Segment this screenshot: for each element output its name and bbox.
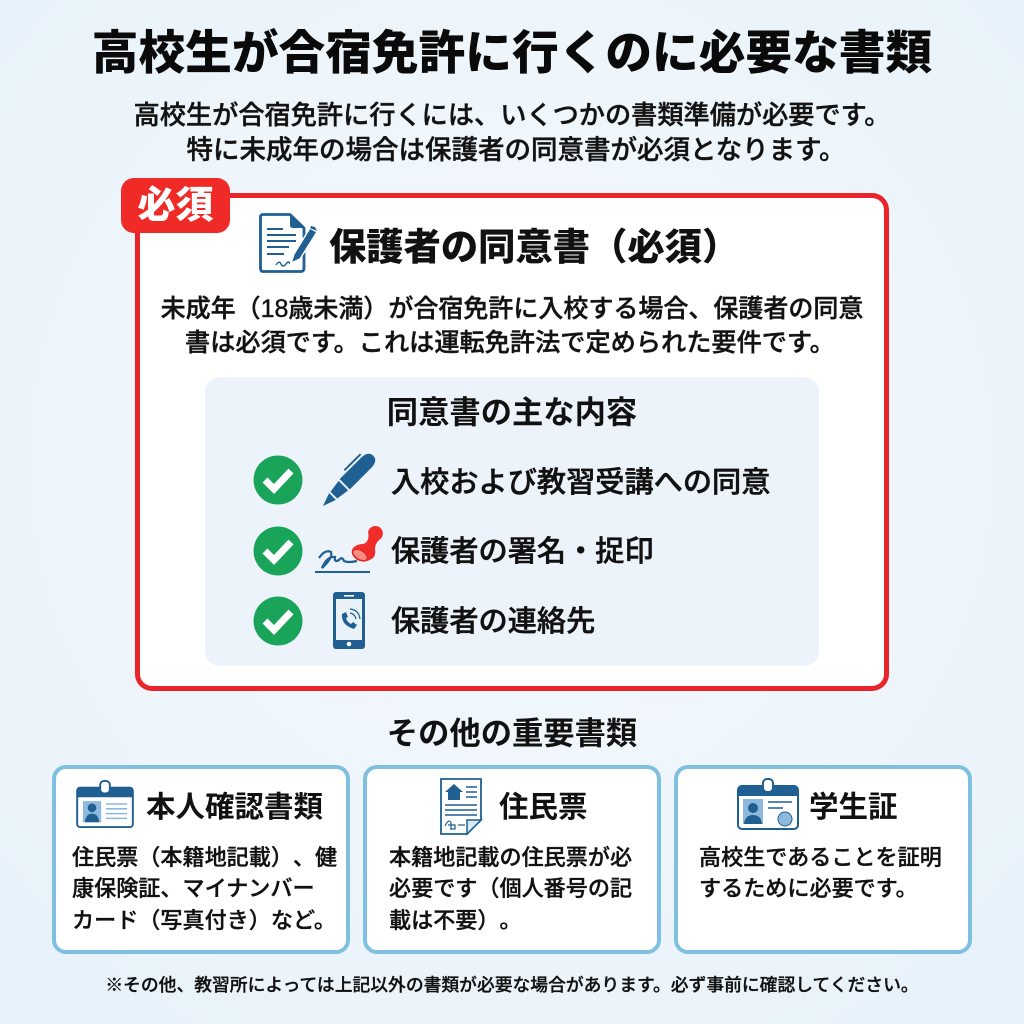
icon: smartphone [333, 592, 365, 649]
card text [699, 845, 942, 901]
card: resident record [363, 765, 661, 954]
intro text: 特に未成年の場合は保護者の同意書が必須となります。 [186, 135, 846, 165]
card text: 必要です（個人番号の記 [389, 876, 632, 901]
icon: check [254, 526, 302, 576]
card text: 康保険証、マイナンバー [72, 876, 315, 901]
title: 高校生が合宿免許に行くのに必要な書類 [92, 27, 932, 79]
icon: check [254, 596, 302, 646]
contents heading: 同意書の主な内容 [387, 395, 637, 430]
card text: するために必要です。 [699, 876, 918, 901]
icon: check [254, 456, 302, 504]
panel: consent form [135, 193, 889, 691]
icon: document with pen [259, 213, 317, 273]
panel: consent contents [205, 377, 819, 666]
card title: 学生証 [809, 791, 898, 824]
icon: ID badge [76, 780, 134, 828]
consent description: 書は必須です。これは運転免許法で定められた要件です。 [185, 329, 835, 357]
icon: resident document [440, 778, 483, 836]
intro text [134, 100, 890, 165]
card text: 高校生であることを証明 [699, 845, 942, 870]
item text: 保護者の連絡先 [391, 606, 595, 638]
card text: 本籍地記載の住民票が必 [389, 845, 632, 870]
card title: 住民票 [499, 791, 588, 824]
icon: signature and stamp [315, 526, 383, 573]
footnote: ※その他、教習所によっては上記以外の書類が必要な場合があります。必ず事前に確認してください。 [105, 975, 919, 995]
consent description [161, 295, 863, 357]
card title: 本人確認書類 [146, 791, 323, 824]
icon: pen [323, 454, 376, 506]
item: contact [254, 592, 595, 649]
badge: required [121, 178, 230, 233]
intro text: 高校生が合宿免許に行くには、いくつかの書類準備が必要です。 [134, 100, 890, 130]
card: identity documents [52, 765, 350, 954]
card text [389, 845, 632, 933]
item: agreement [254, 454, 770, 506]
icon: student ID badge [737, 778, 799, 830]
item text: 入校および教習受講への同意 [391, 467, 770, 499]
card text: カード（写真付き）など。 [72, 908, 336, 933]
item text: 保護者の署名・捉印 [391, 536, 654, 568]
item: signature and seal [254, 526, 654, 576]
card text: 住民票（本籍地記載）、健 [72, 845, 337, 870]
card: student ID [674, 765, 972, 954]
card text [72, 845, 337, 933]
consent description: 未成年（18歳未満）が合宿免許に入校する場合、保護者の同意 [161, 295, 863, 323]
card text: 載は不要）。 [389, 908, 522, 933]
badge: required: 必須 [137, 185, 214, 227]
other documents heading: その他の重要書類 [387, 716, 637, 751]
consent heading: 保護者の同意書（必須） [329, 226, 739, 268]
